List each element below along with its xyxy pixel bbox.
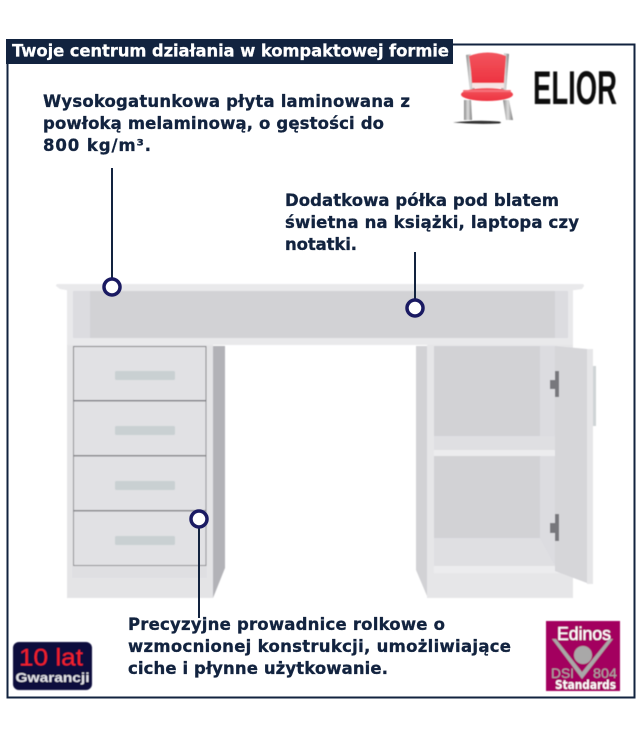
desk illustration bbox=[56, 284, 596, 598]
title banner: Twoje centrum działania w kompaktowej formie bbox=[12, 42, 449, 60]
callout text: drawer runners bbox=[128, 615, 511, 678]
callout text: laminated board bbox=[43, 92, 410, 155]
callout text: extra shelf: Dodatkowa półka pod blatem bbox=[285, 191, 559, 210]
callout text: extra shelf: notatki. bbox=[285, 235, 357, 254]
callout text: drawer runners: ciche i płynne użytkowanie. bbox=[128, 659, 388, 678]
badge: 10-year warranty: 10 lat bbox=[19, 644, 83, 672]
icon: chair bbox=[453, 52, 513, 124]
badge: Edinos DSI 804 Standards: 804 bbox=[593, 665, 617, 681]
callout text: drawer runners: wzmocnionej konstrukcji, umożliwiające bbox=[128, 637, 511, 656]
badge: Edinos DSI 804 Standards: Edinos bbox=[557, 624, 611, 644]
logo: Elior chair bbox=[453, 52, 617, 124]
callout text: laminated board: Wysokogatunkowa płyta laminowana z bbox=[43, 92, 410, 111]
callout text: drawer runners: Precyzyjne prowadnice rolkowe o bbox=[128, 615, 445, 634]
badge: 10-year warranty bbox=[13, 642, 92, 690]
right pedestal bbox=[416, 345, 574, 598]
callout text: laminated board: powłoką melaminową, o gęstości do bbox=[43, 114, 384, 133]
open shelf under the top bbox=[67, 290, 573, 345]
badge: Edinos DSI 804 Standards bbox=[546, 621, 620, 692]
drawers bbox=[74, 346, 206, 566]
desk top bbox=[56, 284, 584, 291]
pointer: shelf bbox=[407, 252, 423, 316]
callout text: extra shelf bbox=[285, 191, 579, 254]
callout text: extra shelf: świetna na książki, laptopa czy bbox=[285, 213, 579, 232]
left pedestal bbox=[67, 345, 225, 598]
callout text: laminated board: 800 kg/m³. bbox=[43, 136, 151, 155]
hinges bbox=[550, 371, 559, 541]
badge: Edinos DSI 804 Standards: DSI bbox=[551, 665, 574, 681]
pointer: laminated board bbox=[104, 168, 120, 295]
pointer: drawer runners bbox=[191, 511, 207, 618]
badge: 10-year warranty: Gwarancji bbox=[16, 671, 90, 685]
badge: Edinos DSI 804 Standards: Standards bbox=[555, 678, 616, 692]
open door bbox=[555, 346, 596, 584]
